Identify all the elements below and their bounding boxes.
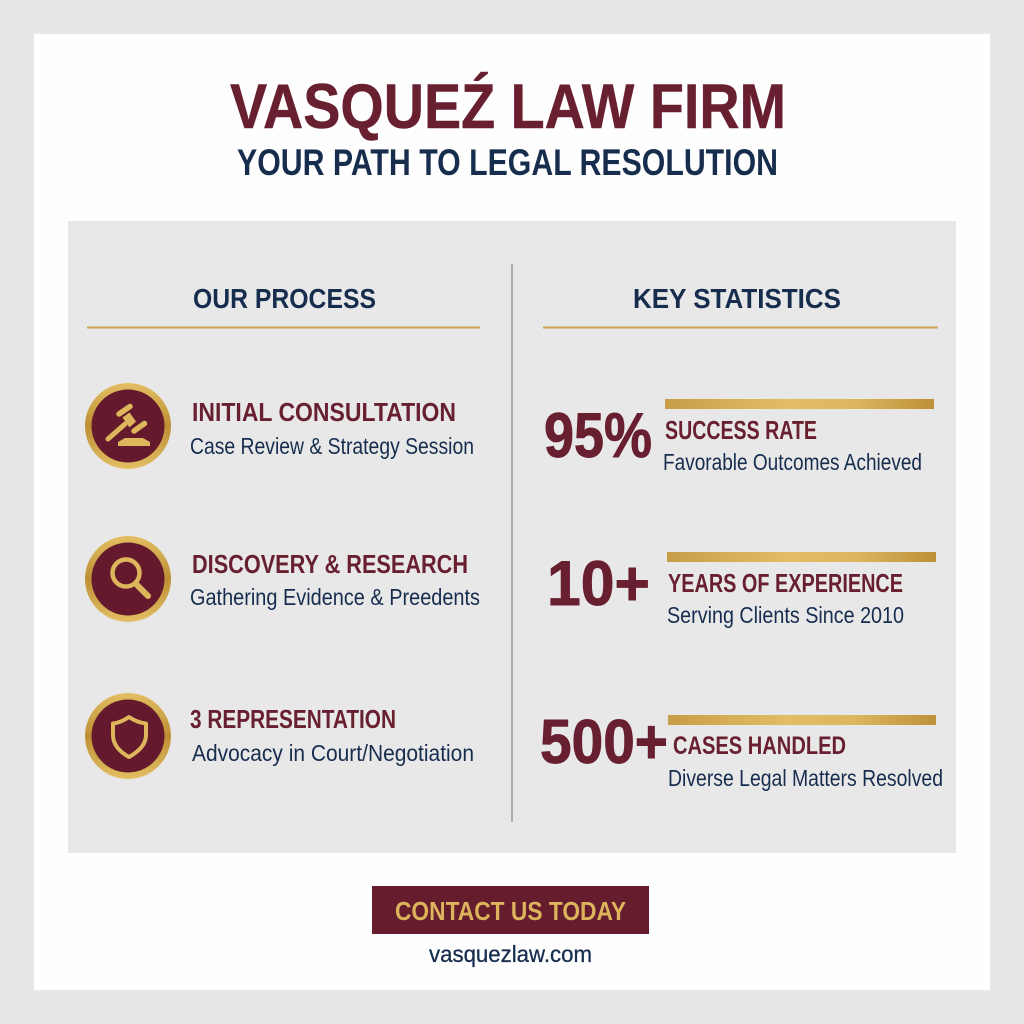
call to action button bbox=[372, 886, 649, 934]
main panel bbox=[68, 221, 956, 853]
heading: key statistics: KEY STATISTICS bbox=[633, 283, 841, 314]
step 3 title: 3 REPRESENTATION bbox=[190, 704, 396, 734]
call to action button: CONTACT US TODAY bbox=[395, 896, 626, 926]
icon: magnifying glass bbox=[85, 536, 171, 622]
gold bar bbox=[668, 715, 936, 725]
stat label: SUCCESS RATE bbox=[665, 415, 817, 445]
step 1 description: Case Review & Strategy Session bbox=[190, 433, 474, 459]
icon: gavel bbox=[85, 383, 171, 469]
subtitle: YOUR PATH TO LEGAL RESOLUTION bbox=[237, 142, 778, 183]
website: vasquezlaw.com bbox=[429, 941, 592, 967]
stat: years of experience bbox=[547, 549, 936, 628]
step 2: discovery and research bbox=[85, 536, 480, 622]
stat number 10+: 10+ bbox=[547, 549, 650, 619]
stat number 500+: 500+ bbox=[540, 708, 668, 777]
stat: success rate bbox=[544, 399, 934, 475]
gold bar bbox=[665, 399, 934, 409]
icon: shield bbox=[85, 693, 171, 779]
panel: our process bbox=[85, 283, 480, 779]
gold bar bbox=[667, 552, 936, 562]
step 3 description: Advocacy in Court/Negotiation bbox=[192, 740, 474, 766]
stat description: Favorable Outcomes Achieved bbox=[663, 449, 922, 475]
heading: our process: OUR PROCESS bbox=[193, 283, 376, 314]
title: VASQUEŹ LAW FIRM bbox=[230, 72, 786, 142]
stat description: Serving Clients Since 2010 bbox=[667, 602, 904, 628]
stat label: CASES HANDLED bbox=[673, 732, 846, 760]
step 1 title: INITIAL CONSULTATION bbox=[192, 397, 456, 427]
stat: cases handled bbox=[540, 708, 943, 791]
header bbox=[230, 72, 786, 183]
step 2 description: Gathering Evidence & Preedents bbox=[190, 584, 480, 610]
stat number 95%: 95% bbox=[544, 401, 652, 471]
panel: key statistics bbox=[540, 283, 943, 791]
stat label: YEARS OF EXPERIENCE bbox=[668, 568, 903, 598]
step 2 title: DISCOVERY & RESEARCH bbox=[192, 549, 468, 579]
step 3: representation bbox=[85, 693, 474, 779]
step 1: initial consultation bbox=[85, 383, 474, 469]
stat description: Diverse Legal Matters Resolved bbox=[668, 765, 943, 791]
